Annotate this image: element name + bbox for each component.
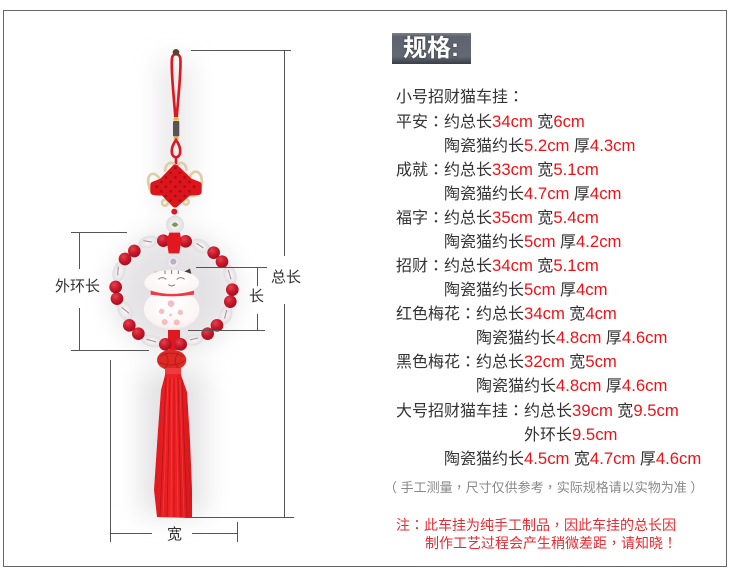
top floral bead (166, 216, 184, 234)
outer ring dimension (71, 232, 149, 350)
spec: 成就: 成就：约总长33cm 宽5.1cm (396, 156, 599, 180)
lower centre knot (168, 330, 180, 350)
spec: 平安: 平安：约总长34cm 宽6cm (396, 108, 585, 132)
heading: specifications (392, 33, 471, 64)
gold rings (148, 163, 202, 206)
small size title: 小号招财猫车挂： (396, 83, 524, 107)
red note continued: 制作工艺过程会产生稍微差距，请知晓！ (425, 533, 677, 553)
nail (173, 49, 179, 56)
spec: 红色梅花: 红色梅花：约总长34cm 宽4cm (396, 300, 617, 324)
beads over the lower knot (159, 338, 187, 351)
spec: 黑色梅花 ceramic cat: 陶瓷猫约长4.8cm 厚4.6cm (476, 376, 667, 395)
dimension lines (71, 50, 294, 542)
red knot (153, 167, 199, 205)
spec: 招财 ceramic cat: 陶瓷猫约长5cm 厚4cm (444, 280, 608, 299)
hanging cord and Chinese knot (148, 49, 202, 215)
total length dimension (185, 50, 294, 518)
ring of beads with lucky cat (109, 216, 239, 370)
spec: 红色梅花 ceramic cat: 陶瓷猫约长4.8cm 厚4.6cm (476, 328, 667, 347)
label: outer ring length: 外环长 (55, 278, 100, 295)
glass bead pattern (118, 241, 231, 342)
cat length dimension (188, 267, 267, 330)
red beads (109, 234, 239, 340)
spec: large outer ring: 外环长9.5cm (524, 425, 617, 444)
glass beads (110, 234, 239, 349)
width dimension (110, 360, 238, 542)
small red bead below knot (171, 209, 177, 215)
spec: 黑色梅花: 黑色梅花：约总长32cm 宽5cm (396, 348, 617, 372)
heading: specifications: 规格: (403, 35, 459, 62)
floral bead above cat (166, 255, 180, 269)
spec: 福字 ceramic cat: 陶瓷猫约长5cm 厚4.2cm (444, 232, 621, 251)
lucky cat (144, 269, 199, 329)
label: width: 宽 (167, 526, 182, 543)
spec: 招财: 招财：约总长34cm 宽5.1cm (396, 252, 599, 276)
measurement disclaimer: （ 手工测量，尺寸仅供参考，实际规格请以实物为准 ） (384, 477, 703, 496)
spec: 成就 ceramic cat: 陶瓷猫约长4.7cm 厚4cm (444, 184, 621, 203)
spec: large size: 大号招财猫车挂：约总长39cm 宽9.5cm (396, 397, 679, 421)
lower cord loop (172, 140, 180, 164)
tassel (154, 368, 192, 518)
spec: 福字: 福字：约总长35cm 宽5.4cm (396, 204, 599, 228)
spec: 平安 ceramic cat: 陶瓷猫约长5.2cm 厚4.3cm (444, 136, 635, 155)
label: cat length: 长 (249, 288, 264, 305)
soft product shadow (112, 60, 236, 515)
hanging loop (172, 54, 181, 117)
red note: 注：此车挂为纯手工制品，因此车挂的总长因 (396, 515, 676, 535)
specification list (396, 83, 701, 468)
cord bead (173, 118, 179, 139)
label: total length: 总长 (271, 269, 301, 286)
top centre knot (167, 233, 181, 253)
spec: large ceramic cat: 陶瓷猫约长4.5cm 宽4.7cm 厚4.6cm (444, 449, 701, 468)
woven knot (157, 350, 186, 370)
